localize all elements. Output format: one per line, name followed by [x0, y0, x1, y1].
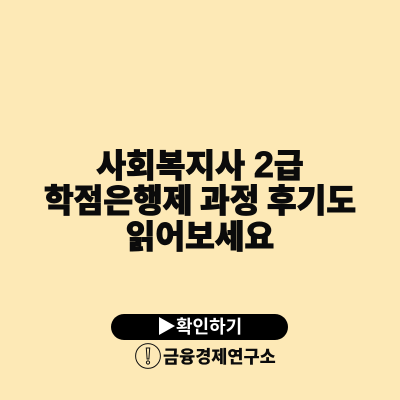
icon: exclamation circle	[135, 343, 161, 369]
icon: play triangle	[159, 317, 175, 335]
title: 읽어보세요	[126, 219, 274, 255]
button: confirm	[111, 314, 288, 340]
title: 사회복지사 2급	[96, 144, 304, 185]
button label: 확인하기	[176, 317, 242, 337]
brand name: 금융경제연구소	[163, 347, 276, 367]
title: 학점은행제 과정 후기도	[44, 183, 356, 219]
brand: icon and name	[135, 343, 276, 369]
title	[44, 144, 356, 255]
